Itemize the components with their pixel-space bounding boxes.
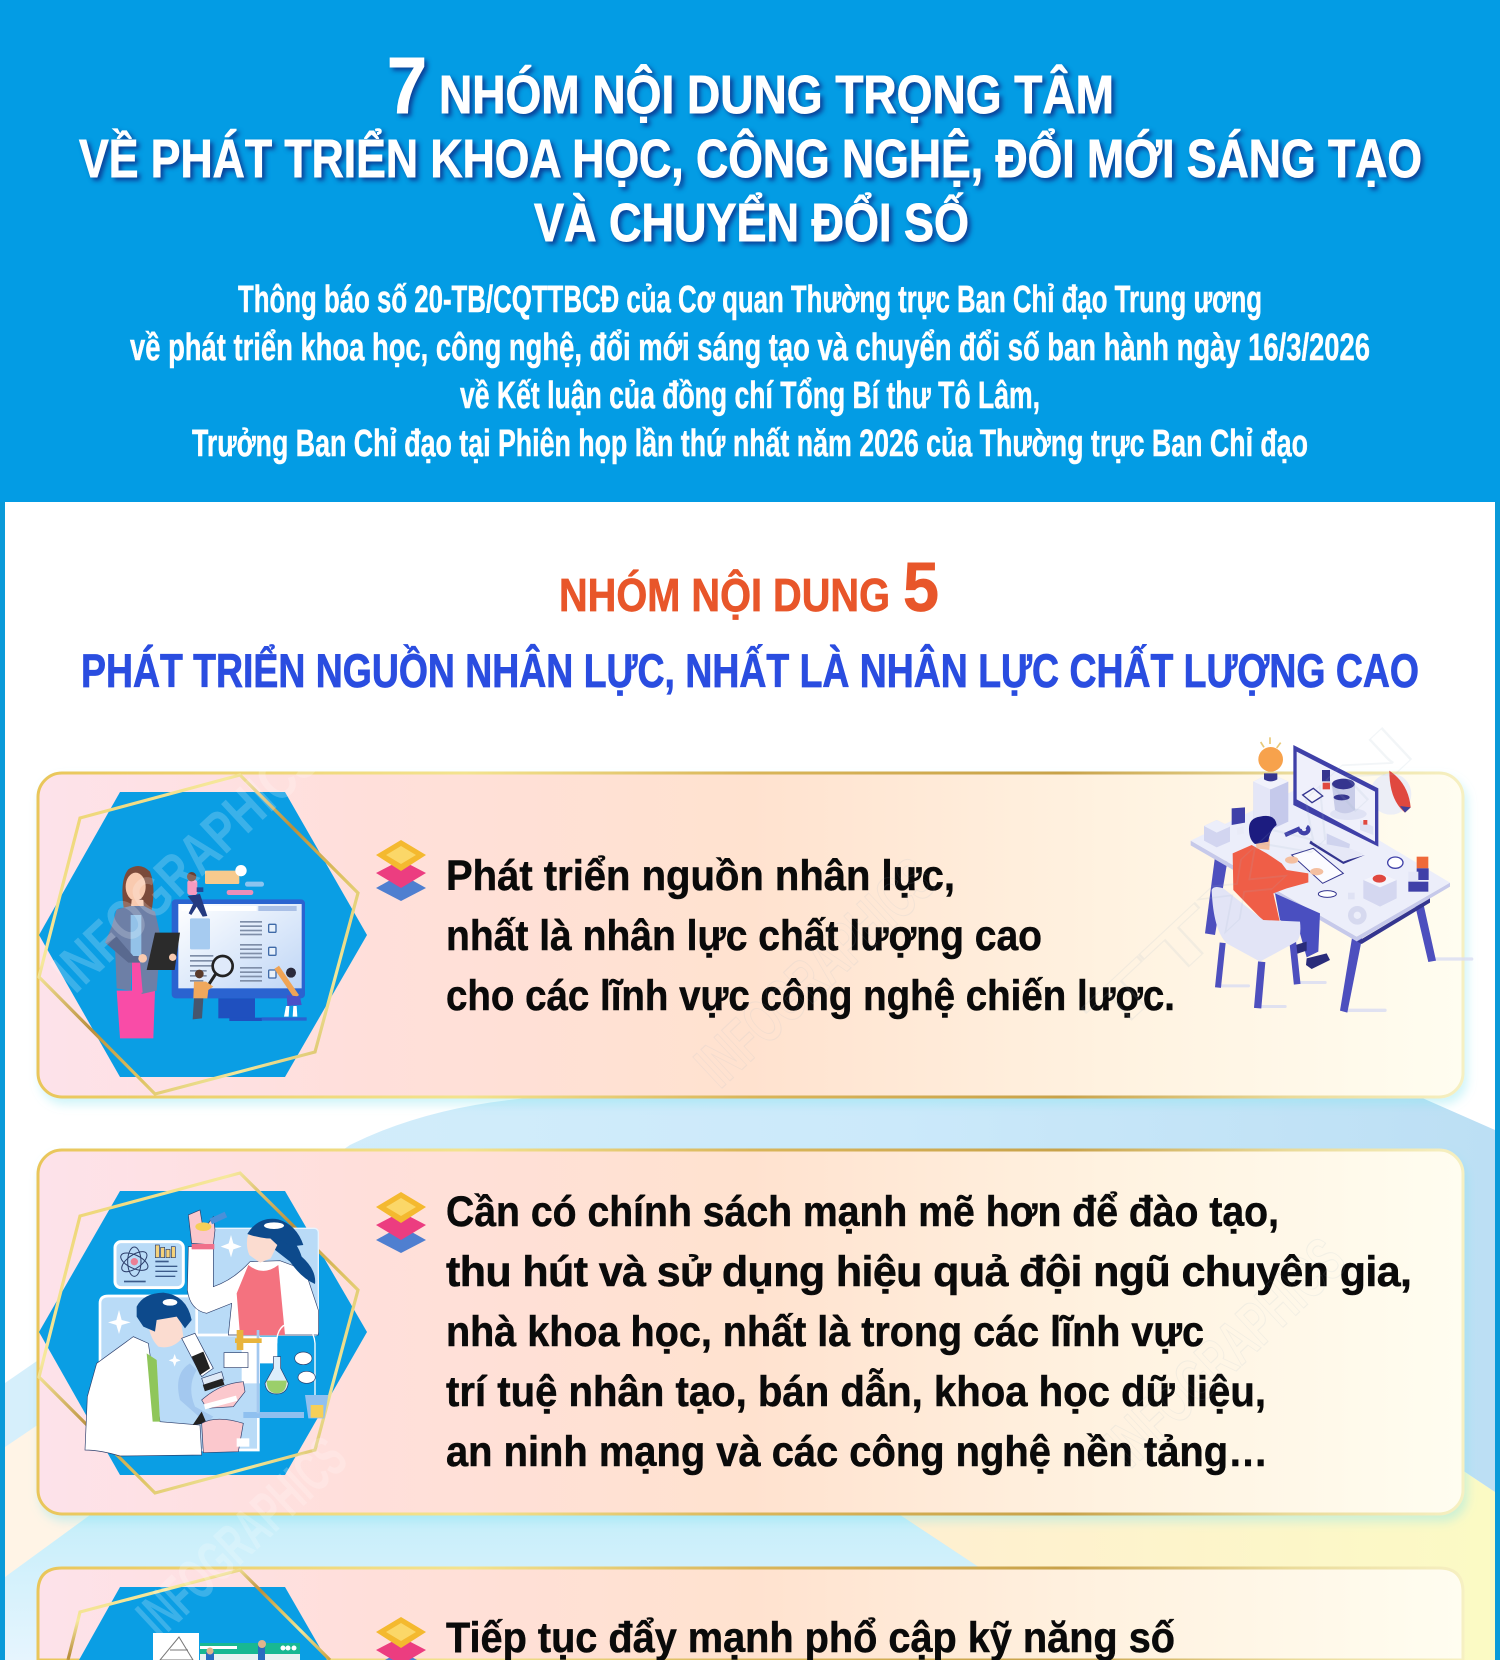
icon: stacked layers: [376, 1192, 426, 1253]
icon: hexagon frame 3: [68, 1570, 330, 1660]
section heading: group number: [559, 548, 939, 626]
subtitle text block: [130, 279, 1370, 465]
title: 7: [387, 41, 427, 130]
text block: card 2: trí tuệ nhân tạo, bán dẫn, khoa học dữ liệu,: [446, 1367, 1266, 1416]
icon: stacked layers: [376, 840, 426, 901]
text block: card 2: nhà khoa học, nhất là trong các lĩnh vực: [446, 1308, 1204, 1356]
title: NHÓM NỘI DUNG TRỌNG TÂM: [439, 64, 1114, 125]
section heading: group number: NHÓM NỘI DUNG: [559, 569, 890, 621]
text block: card 1: cho các lĩnh vực công nghệ chiến lược.: [446, 972, 1175, 1020]
watermarks: [40, 713, 1427, 1650]
title: [79, 41, 1422, 253]
text block: card 1: [446, 852, 1175, 1020]
subtitle text block: về Kết luận của đồng chí Tổng Bí thư Tô Lâm,: [460, 375, 1040, 417]
text block: card 2: [446, 1188, 1412, 1476]
watermarks: INFOGRAPHICS: [40, 725, 333, 1005]
text block: card 1: Phát triển nguồn nhân lực,: [446, 852, 955, 900]
text block: card 2: an ninh mạng và các công nghệ nền tảng…: [446, 1428, 1268, 1476]
text block: card 2: Cần có chính sách mạnh mẽ hơn để đào tạo,: [446, 1188, 1279, 1236]
icon: hexagon frame 1: [39, 775, 367, 1094]
panel: card 3: [38, 1568, 1463, 1660]
illustration: person at desk: [1191, 737, 1473, 1013]
panel: card 1: [38, 773, 1463, 1097]
illustration: scientists: [85, 1210, 328, 1456]
icon: stacked layers: [376, 1617, 426, 1660]
watermarks: INFOGRAPHICS: [1092, 1225, 1359, 1480]
watermarks: TTXVN: [1072, 713, 1427, 1050]
text block: card 1: nhất là nhân lực chất lượng cao: [446, 912, 1042, 960]
icon: hexagon frame 2: [39, 1173, 367, 1493]
watermarks: INFOGRAPHICS: [682, 845, 949, 1100]
watermarks: INFOGRAPHICS: [125, 1425, 359, 1650]
illustration: classroom screen: [153, 1633, 300, 1660]
panel: card 2: [38, 1150, 1463, 1514]
text block: card 2: thu hút và sử dụng hiệu quả đội ngũ chuyên gia,: [446, 1248, 1412, 1296]
section heading: group number: 5: [903, 548, 939, 626]
title: VÀ CHUYỂN ĐỔI SỐ: [534, 193, 969, 253]
illustration: teacher and monitor: [105, 865, 307, 1038]
